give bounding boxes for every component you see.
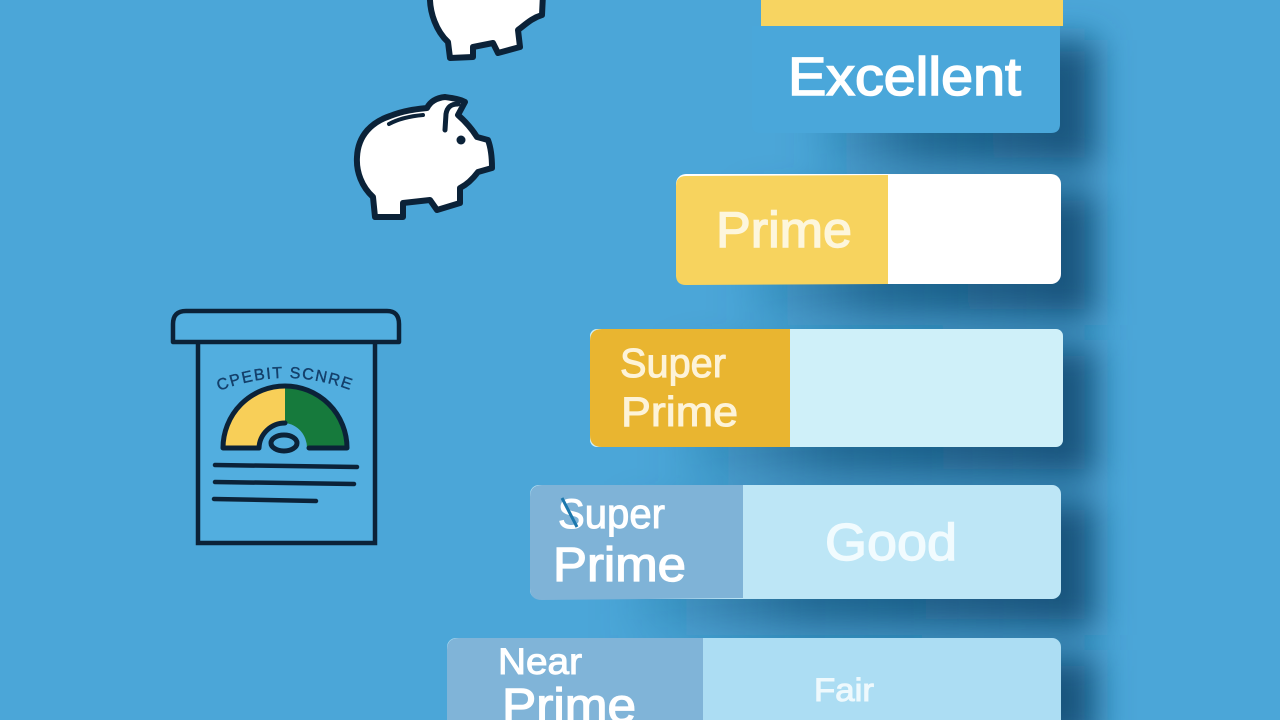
bar: Fair bbox=[447, 638, 1061, 720]
gauge: green segment bbox=[285, 386, 347, 448]
gauge needle hub bbox=[271, 435, 297, 451]
report page bbox=[198, 340, 375, 543]
bar: Prime bbox=[676, 174, 1061, 285]
label: Excellent: Excellent bbox=[788, 47, 1021, 107]
gauge label: CPEBIT SCNRE bbox=[217, 366, 353, 390]
bar: Good bbox=[530, 485, 1061, 600]
report text lines bbox=[214, 465, 357, 501]
yellow band above Excellent bbox=[761, 0, 1063, 26]
label: Prime: Prime bbox=[621, 388, 738, 435]
label: Prime: Prime bbox=[716, 202, 852, 258]
label: Super: Super bbox=[620, 340, 726, 386]
bar: Super Prime gold bbox=[590, 329, 1063, 447]
gauge outline bbox=[223, 386, 347, 448]
bar: Excellent bbox=[752, 0, 1063, 133]
label: Prime: Prime bbox=[553, 539, 686, 592]
label: Good: Good bbox=[825, 514, 957, 572]
label: Super: Super bbox=[558, 490, 665, 537]
report top roller bbox=[173, 311, 399, 342]
label: Fair: Fair bbox=[814, 672, 874, 708]
Near Prime label block bbox=[447, 638, 703, 720]
Super Prime label block bbox=[590, 329, 790, 447]
label: Near: Near bbox=[498, 641, 582, 682]
gauge: yellow segment bbox=[223, 386, 285, 448]
Super Prime label block bbox=[530, 485, 743, 600]
icon: credit score report bbox=[170, 308, 402, 546]
Prime label block bbox=[676, 175, 888, 285]
glitch stroke in the letter S bbox=[562, 498, 577, 527]
icon: lower piggy bank bbox=[357, 97, 492, 217]
icon: upper piggy bank, cropped by the top edge bbox=[430, 0, 543, 58]
